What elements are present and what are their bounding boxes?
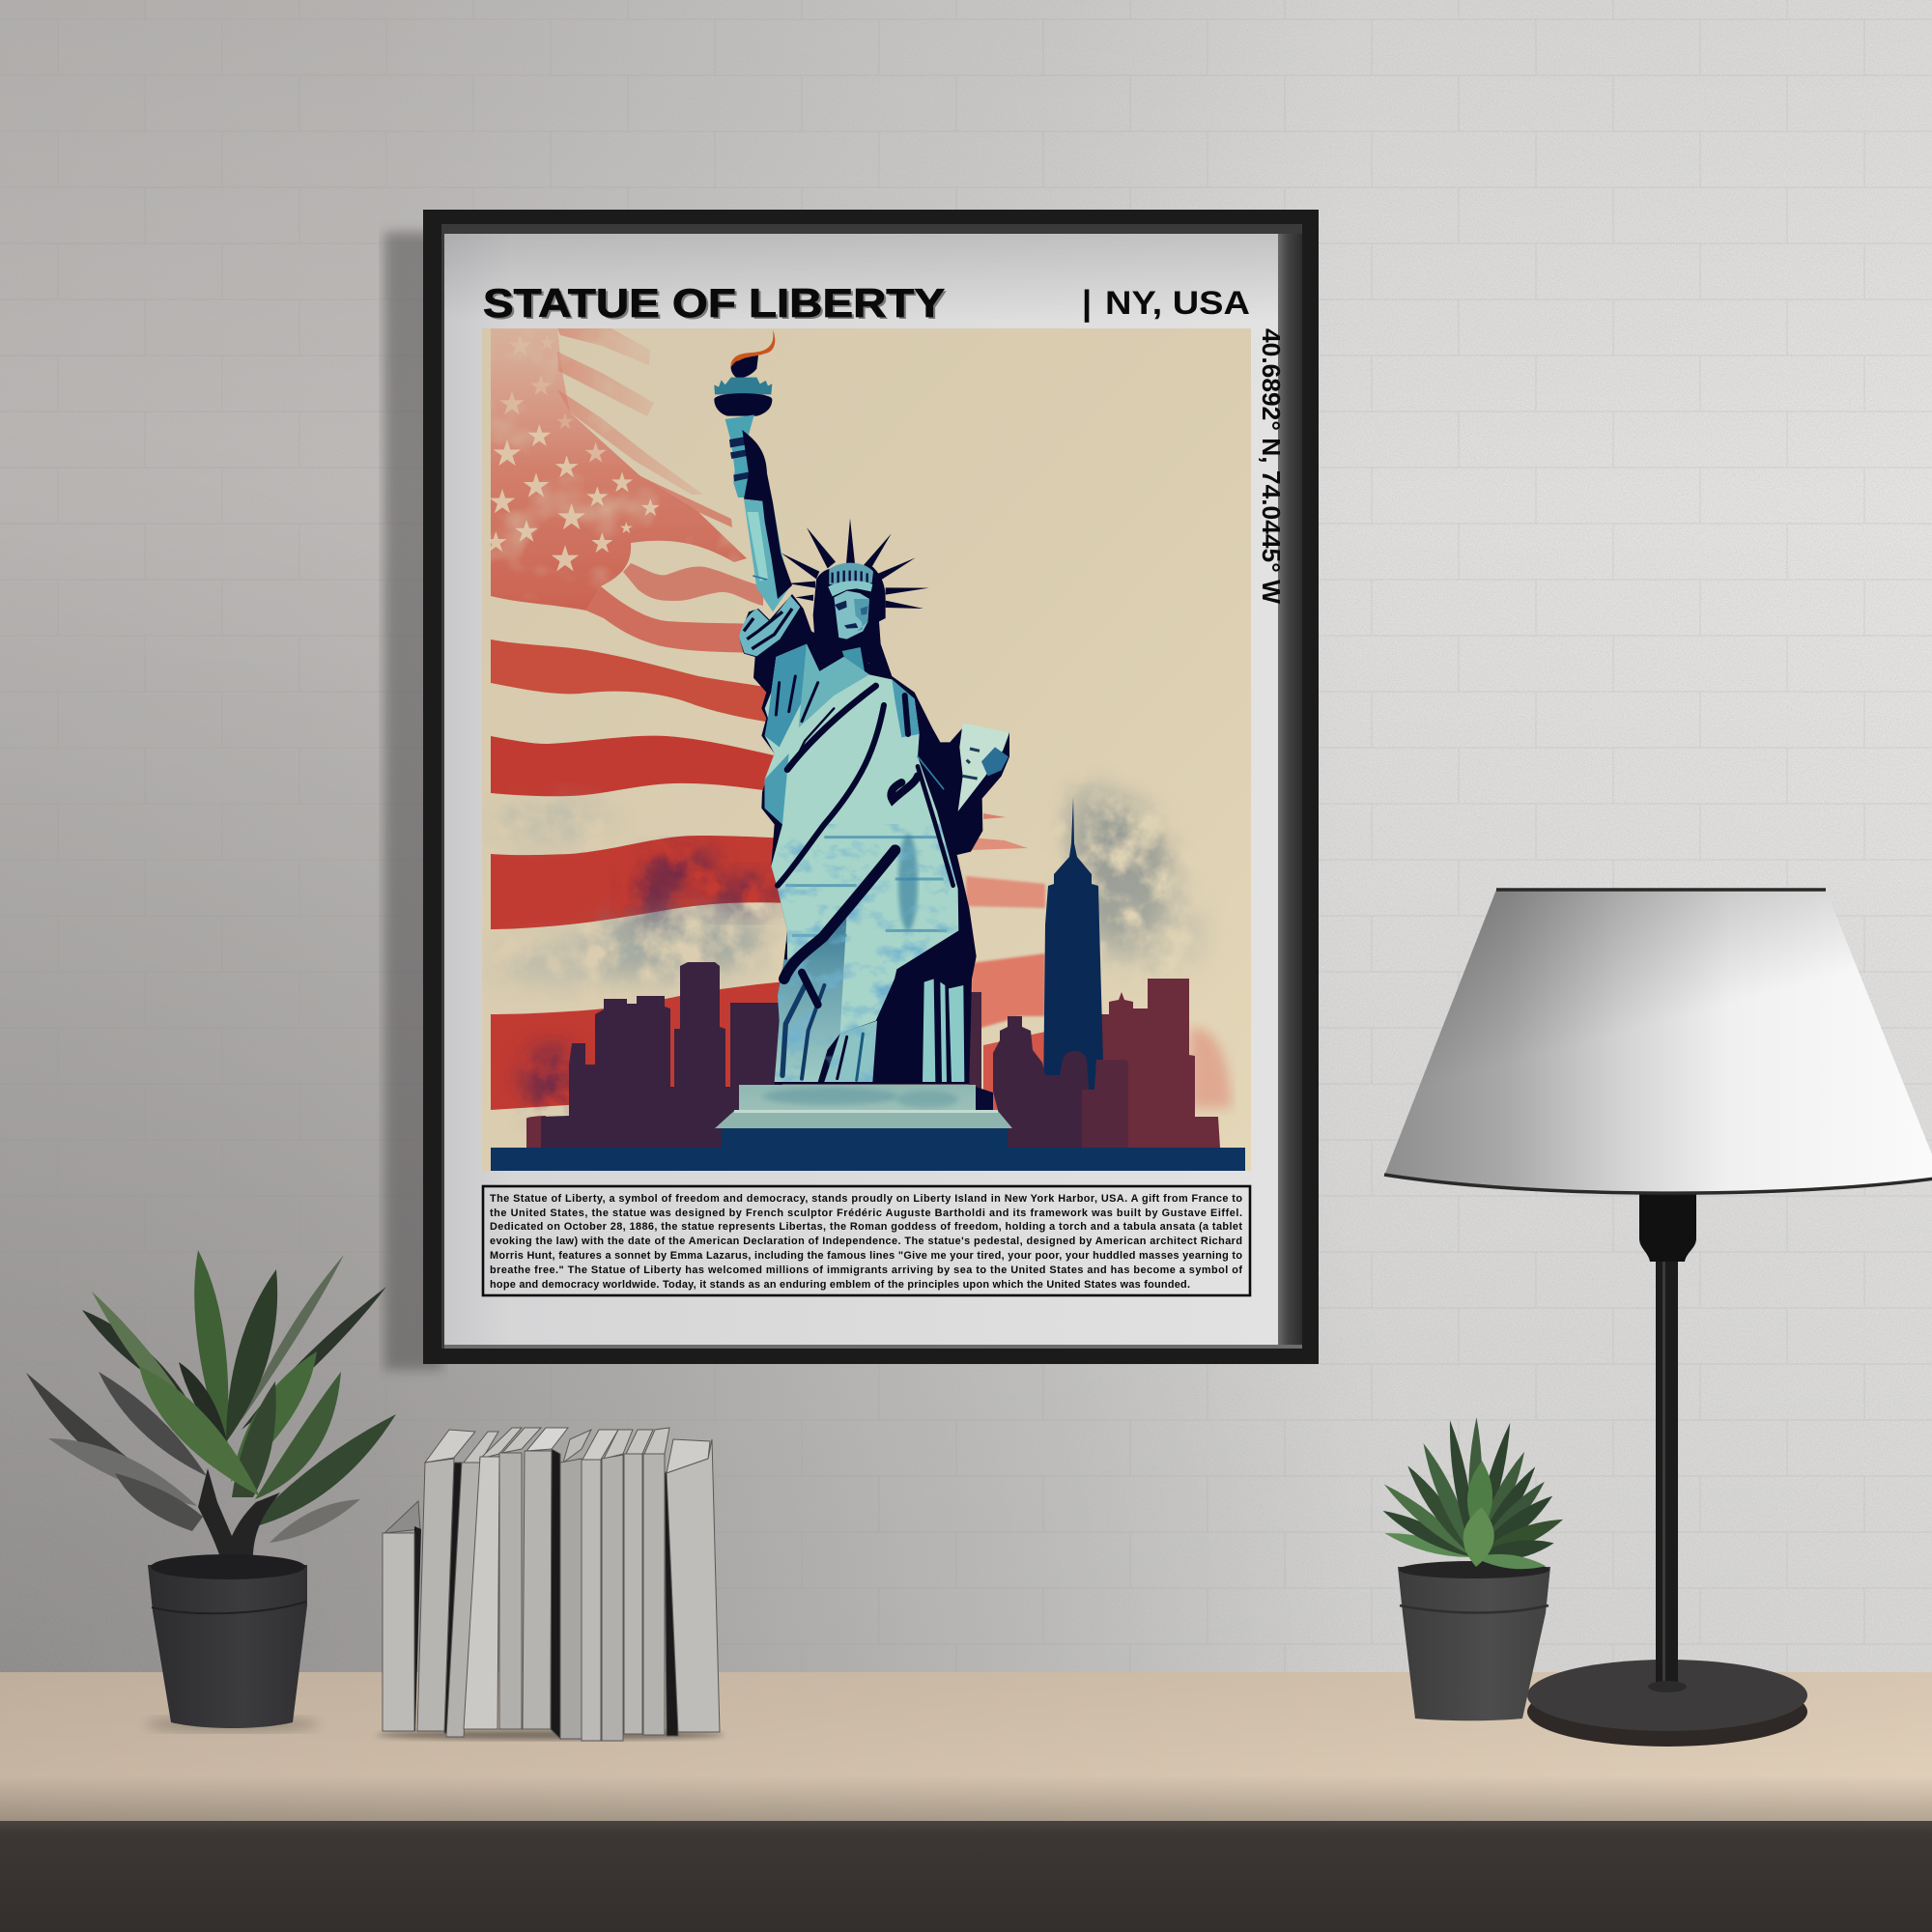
location label: | <box>1082 283 1092 324</box>
title: STATUE OF LIBERTY <box>483 280 945 326</box>
table lamp <box>1384 890 1932 1747</box>
flag <box>485 328 1232 1111</box>
frame shadow on wall <box>384 232 442 1370</box>
location label <box>1082 283 1250 324</box>
lower robe <box>775 901 964 1082</box>
description box: hope and democracy worldwide. Today, it stands as an enduring emblem of the principles upon which the United States was founded. <box>490 1279 1190 1291</box>
tablet <box>958 723 1009 811</box>
left potted plant <box>26 1250 396 1732</box>
right side stripes <box>983 813 1006 819</box>
plant leaves <box>26 1250 396 1570</box>
lamp shade <box>1384 890 1932 1194</box>
description box: Morris Hunt, features a sonnet by Emma Lazarus, including the famous lines "Give me your tired, your poor, your huddled masses yearning to <box>490 1250 1242 1262</box>
sleeve <box>739 596 800 656</box>
flag canton <box>491 328 747 611</box>
description box: Dedicated on October 28, 1886, the statue represents Libertas, the Roman goddess of freedom, holding a torch and a tabula ansata (a tablet <box>490 1221 1242 1233</box>
coordinates: 40.6892° N, 74.0445° W <box>1257 328 1286 604</box>
statue silhouette <box>739 594 1009 1085</box>
succulent pot <box>1398 1561 1550 1720</box>
poster frame <box>423 210 1319 1364</box>
title: STATUE OF LIBERTY <box>485 282 947 327</box>
lamp socket <box>1639 1194 1696 1262</box>
poster paper <box>444 234 1278 1346</box>
robe folds <box>776 676 953 1080</box>
smoke <box>488 782 1208 1117</box>
robe <box>765 644 958 1034</box>
statue <box>714 330 1009 1089</box>
raised arm <box>744 493 792 611</box>
water band <box>491 1148 1245 1171</box>
pedestal <box>715 1085 1012 1148</box>
robe shading <box>765 644 947 935</box>
right succulent <box>1379 1417 1567 1720</box>
flag stripes <box>623 563 763 606</box>
robe mottling <box>760 824 966 1089</box>
description box: breathe free." The Statue of Liberty has welcomed millions of immigrants arriving by sea to the United States and has become a symbol of <box>490 1264 1242 1276</box>
poster artwork <box>482 328 1251 1171</box>
shelf <box>0 1672 1932 1932</box>
skyline left <box>526 962 782 1148</box>
description box <box>483 1186 1250 1295</box>
description box: The Statue of Liberty, a symbol of freedom and democracy, stands proudly on Liberty Island in New York Harbor, USA. A gift from France to <box>490 1193 1242 1205</box>
torch <box>714 330 775 502</box>
books <box>377 1428 724 1741</box>
head and hair <box>813 567 892 676</box>
diadem <box>828 563 873 596</box>
lamp foot <box>1527 1660 1807 1747</box>
rays of crown <box>781 519 929 609</box>
lamp stem <box>1648 1262 1687 1692</box>
plant pot <box>148 1554 307 1728</box>
hand <box>981 747 1009 776</box>
succulent leaves <box>1379 1417 1567 1573</box>
location label: NY, USA <box>1105 285 1250 322</box>
neck <box>842 647 865 671</box>
description box: evoking the law) with the date of the American Declaration of Independence. The statue's pedestal, designed by American architect Richard <box>490 1236 1242 1247</box>
flag stars <box>485 334 660 571</box>
description box: the United States, the statue was designed by French sculptor Frédéric Auguste Bartholdi and its framework was built by Gustave Eiffel. <box>490 1208 1242 1219</box>
skyline right <box>969 797 1220 1148</box>
face <box>834 591 869 639</box>
